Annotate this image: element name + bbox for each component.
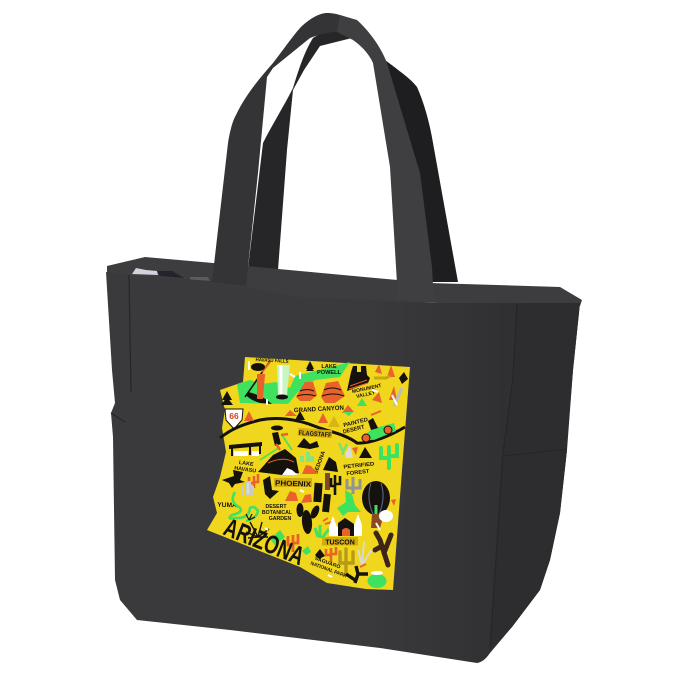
label: Saguaro National Park: SAGUARO — [314, 556, 341, 571]
icon: green and black small plants — [302, 546, 325, 559]
icon: black prickly pear — [296, 503, 321, 534]
label: Yuma: YUMA — [217, 502, 237, 509]
icon: Grand Canyon rock left — [296, 382, 317, 401]
label: Painted Desert: DESERT — [342, 424, 366, 436]
icon: paddle boarder — [245, 361, 272, 404]
icons: scattered white and orange marks — [249, 361, 397, 577]
icons: city buildings — [313, 473, 331, 512]
label: Desert Botanical Garden — [262, 504, 293, 522]
icon: green prickly cactus — [337, 490, 361, 516]
route 66 shield — [225, 409, 243, 429]
icon: mission church — [329, 514, 362, 536]
label: Petrified Forest — [343, 461, 375, 477]
label: Tuscon: TUSCON — [325, 540, 355, 546]
label: Petrified Forest: FOREST — [346, 469, 370, 477]
icon: green snake — [230, 492, 258, 521]
icon: lake havasu bridge — [229, 442, 262, 456]
map outline — [207, 357, 410, 590]
label: Lake Havasu: LAKE — [238, 460, 254, 468]
label: Havasu Falls: HAVASU FALLS — [255, 357, 289, 365]
icon: hiker — [260, 426, 292, 460]
icons: central plants and rocks — [302, 443, 372, 474]
icon: cactus hot air balloon — [362, 481, 396, 528]
Arizona map — [207, 357, 410, 590]
icon: dark mountain — [258, 449, 299, 475]
icon: large dark cactus — [375, 533, 391, 565]
label: Monument Valley: MONUMENT — [351, 383, 382, 395]
label: Desert Botanical Garden: GARDEN — [269, 516, 291, 522]
icon: Havasu waterfall — [276, 365, 290, 400]
front handle strap left — [212, 13, 345, 286]
label: Flagstaff: FLAGSTAFF — [298, 430, 332, 439]
icon: Monument Valley butte — [347, 366, 370, 391]
icons: orange rocks phoenix — [285, 491, 312, 503]
icon: black prickly cactus — [263, 476, 279, 499]
icon: orange rocks — [374, 364, 408, 400]
bag opening and zipper — [107, 257, 582, 306]
front handle strap right — [337, 15, 434, 302]
label: Lake Havasu — [234, 460, 257, 475]
icon: black joshua tree — [346, 566, 368, 583]
label: Desert Botanical Garden: DESERT — [265, 504, 287, 510]
icon: orange cactus west — [249, 474, 258, 488]
label: Phoenix: PHOENIX — [275, 478, 311, 489]
label: Tuscon — [322, 537, 358, 546]
label: Saguaro National Park: NATIONAL PARK — [309, 561, 348, 579]
icon: green car with driver — [361, 411, 396, 442]
icons: agave plants — [246, 514, 269, 538]
icon: black bird — [222, 470, 245, 488]
icon: painted desert mounds — [342, 388, 402, 416]
label: Monument Valley: VALLEY — [356, 390, 377, 400]
back handle strap — [248, 29, 458, 282]
route 66 shield: 66 — [229, 411, 239, 421]
icons: small trees — [244, 410, 340, 427]
icon: pale sage plant — [358, 542, 372, 565]
icon: black cactus — [331, 475, 340, 495]
icon: green and orange plants — [270, 518, 335, 552]
label: Painted Desert: PAINTED — [343, 417, 369, 429]
label: Lake Powell: LAKE — [321, 364, 337, 370]
label: Lake Powell — [317, 364, 342, 376]
label: Monument Valley — [351, 383, 382, 400]
icon: grey cactus — [347, 477, 360, 494]
icon: orange cactus south — [326, 547, 336, 562]
label: Lake Havasu: HAVASU — [234, 466, 257, 475]
icon: tree — [306, 361, 314, 371]
icon: green cactus upper right — [381, 445, 397, 468]
icon: grey cactus west — [243, 482, 253, 495]
label: Grand Canyon: GRAND CANYON — [294, 405, 344, 414]
road — [220, 418, 405, 443]
label: Flagstaff — [298, 428, 332, 439]
icon: tan saguaro — [340, 549, 353, 575]
icon: tree west — [221, 391, 233, 405]
label: Desert Botanical Garden: BOTANICAL — [262, 510, 293, 516]
icon: Grand Canyon rock right — [321, 381, 345, 403]
icon: green barrel cactus — [368, 571, 386, 588]
label: Sedona: SEDONA — [313, 450, 327, 475]
title: Arizona lettering: ARIZONA — [220, 512, 309, 571]
label: Painted Desert — [342, 417, 369, 436]
label: Lake Powell: POWELL — [317, 370, 342, 376]
label: Petrified Forest: PETRIFIED — [343, 461, 375, 471]
bag body — [106, 272, 580, 663]
lake and green band — [237, 362, 350, 404]
icon: dark hill near Flagstaff — [297, 438, 319, 449]
